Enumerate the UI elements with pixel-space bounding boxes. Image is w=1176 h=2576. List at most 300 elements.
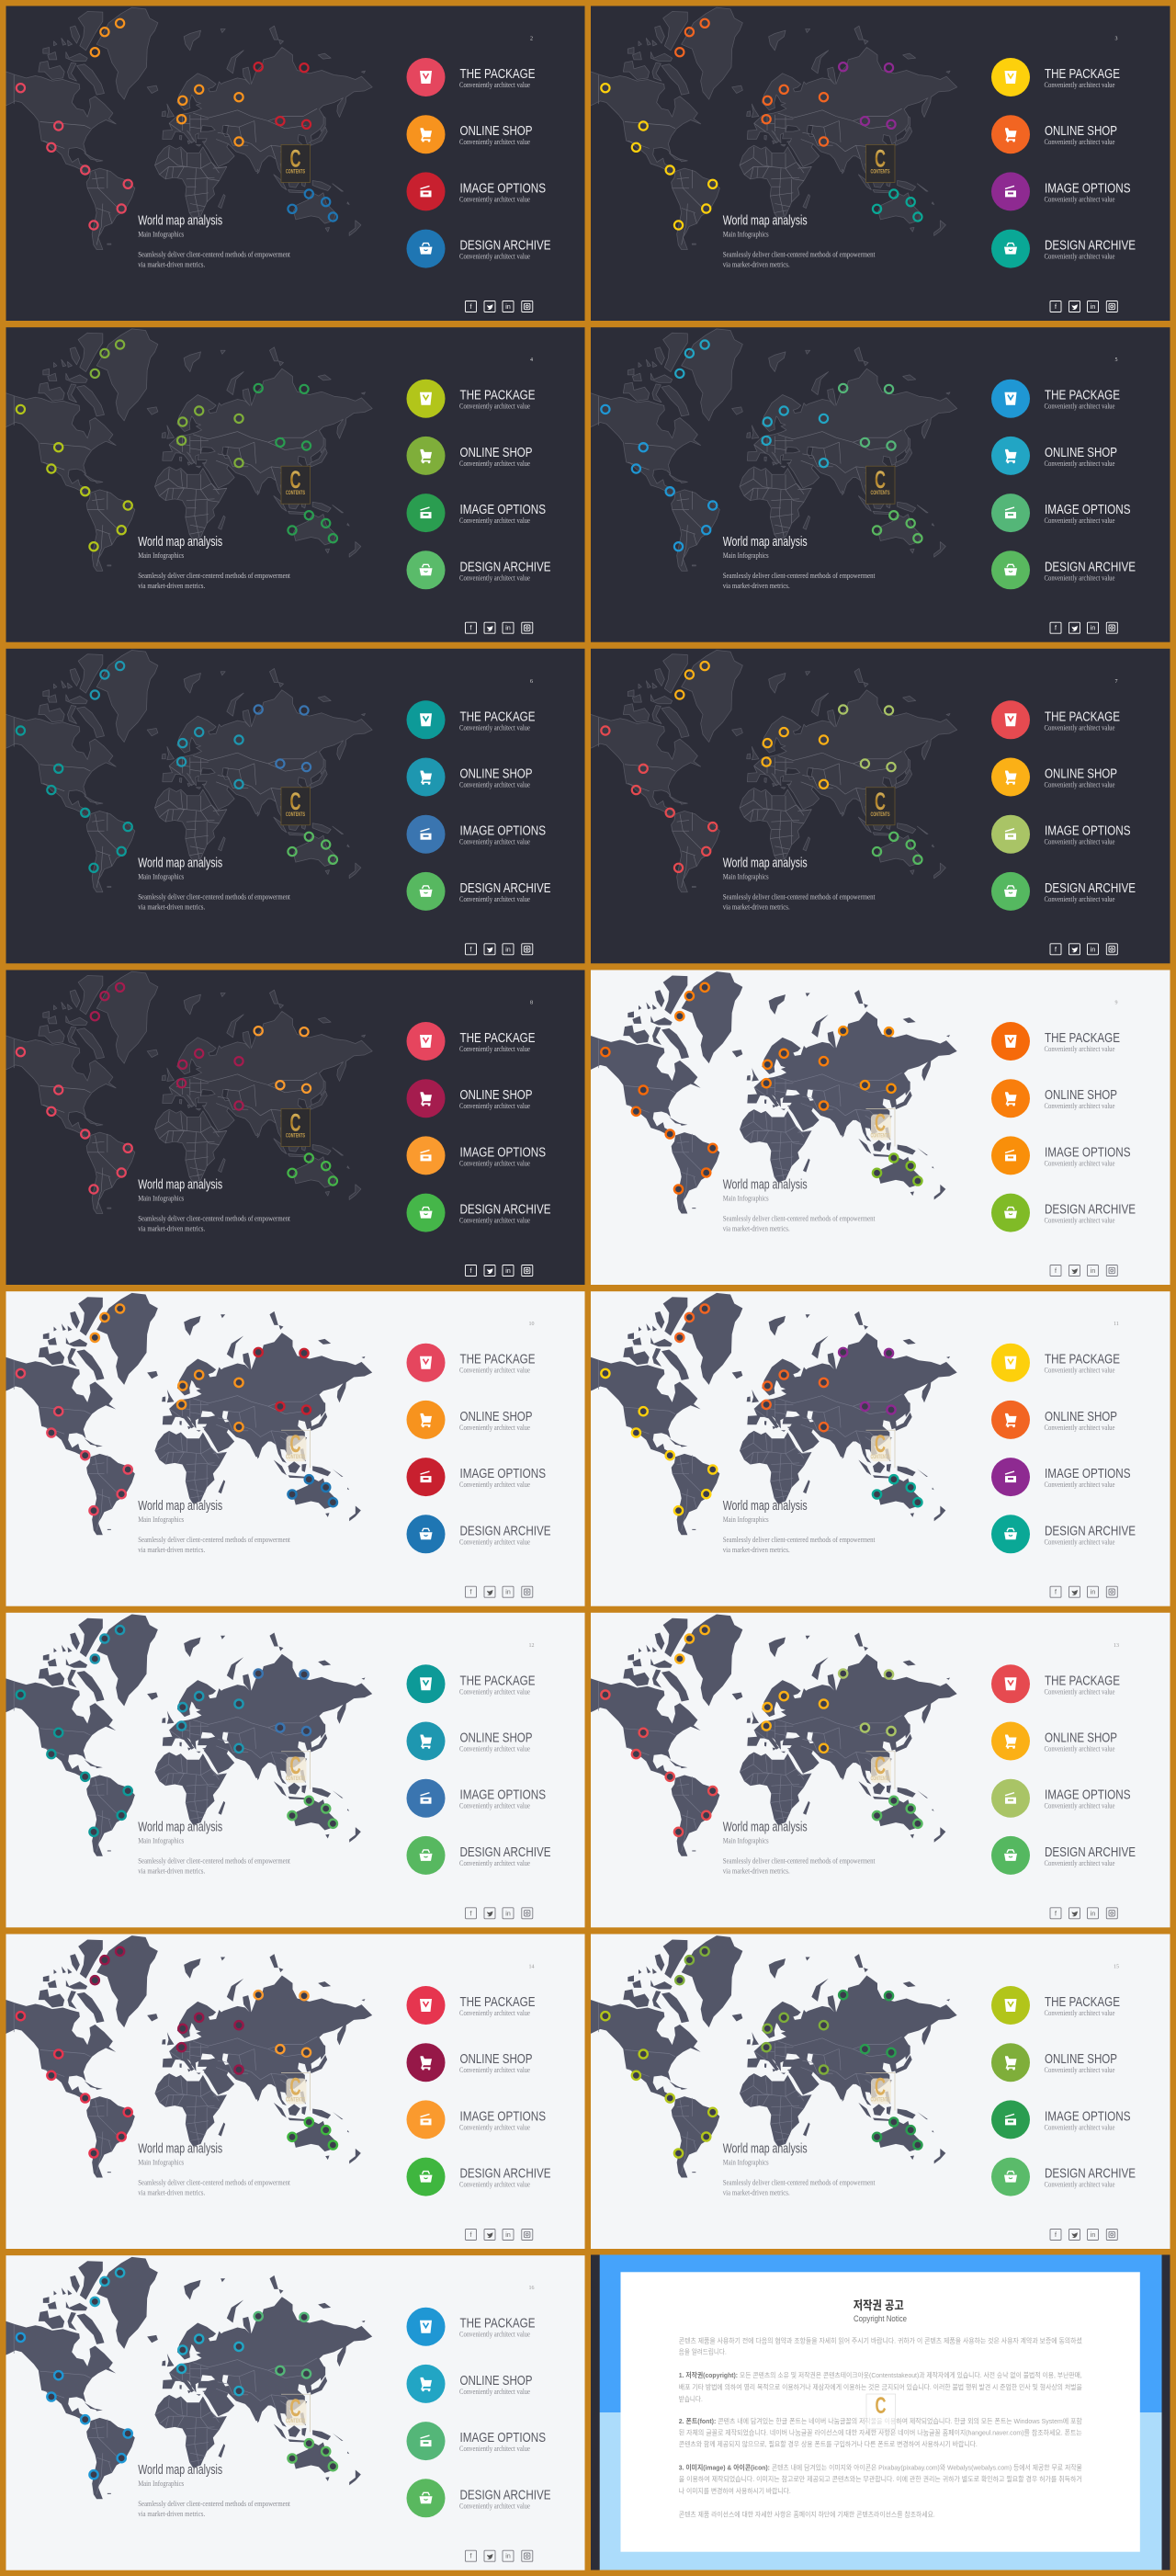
social icons: in bbox=[1091, 2232, 1095, 2239]
item: DESIGN ARCHIVE: Conveniently architect value bbox=[1044, 2181, 1115, 2189]
heading text block: Main Infographics bbox=[723, 873, 769, 881]
panel background bbox=[6, 1934, 584, 2249]
logo watermark: CONTENTS bbox=[871, 1776, 889, 1782]
social icons bbox=[1050, 622, 1117, 633]
panel 5: dark world map slide bbox=[3, 649, 585, 963]
item: ONLINE SHOP bbox=[991, 1401, 1117, 1439]
social icons: in bbox=[505, 1911, 511, 1917]
heading text block: via market-driven metrics. bbox=[723, 2188, 790, 2196]
item: DESIGN ARCHIVE bbox=[991, 1194, 1136, 1232]
heading text block: via market-driven metrics. bbox=[138, 260, 205, 268]
item: DESIGN ARCHIVE: Conveniently architect value bbox=[1044, 1538, 1115, 1546]
item: THE PACKAGE bbox=[991, 1986, 1120, 2025]
logo watermark bbox=[281, 1752, 311, 1789]
page number: 6 bbox=[530, 679, 533, 685]
social icons: in bbox=[1091, 947, 1095, 953]
item: THE PACKAGE bbox=[406, 700, 535, 739]
heading text block: Seamlessly deliver client-centered methods of empowerment bbox=[138, 2500, 291, 2508]
item: IMAGE OPTIONS bbox=[406, 815, 546, 854]
logo watermark: CONTENTS bbox=[871, 1134, 889, 1140]
map pins bbox=[17, 662, 337, 872]
item: DESIGN ARCHIVE bbox=[406, 1836, 551, 1875]
item: THE PACKAGE: Conveniently architect value bbox=[459, 723, 530, 732]
heading text block: Seamlessly deliver client-centered methods of empowerment bbox=[723, 1857, 876, 1866]
notice body text: 콘텐츠와 함께 제공되지 않으므로, 필요할 경우 상용 폰트를 구입하거나 다른 폰트로 변경하여 사용하시기 바랍니다. bbox=[679, 2440, 978, 2448]
item: IMAGE OPTIONS: Conveniently architect value bbox=[459, 1481, 530, 1489]
item: IMAGE OPTIONS: IMAGE OPTIONS bbox=[459, 180, 546, 196]
logo watermark: C bbox=[290, 466, 301, 494]
item: THE PACKAGE: THE PACKAGE bbox=[459, 66, 535, 82]
item: IMAGE OPTIONS: IMAGE OPTIONS bbox=[459, 1144, 546, 1160]
page number: 15 bbox=[1114, 1965, 1119, 1970]
social icons: in bbox=[505, 304, 511, 311]
item: ONLINE SHOP bbox=[991, 757, 1117, 796]
item: ONLINE SHOP: ONLINE SHOP bbox=[1045, 2051, 1117, 2067]
social icons: f bbox=[470, 2232, 472, 2239]
heading text block: Seamlessly deliver client-centered methods of empowerment bbox=[723, 572, 876, 580]
heading text block: Main Infographics bbox=[138, 2158, 184, 2166]
item: ONLINE SHOP bbox=[406, 115, 533, 153]
item: IMAGE OPTIONS: Conveniently architect value bbox=[459, 2123, 530, 2131]
item: THE PACKAGE: THE PACKAGE bbox=[459, 709, 535, 724]
item: ONLINE SHOP: Conveniently architect value bbox=[459, 1424, 530, 1432]
item: DESIGN ARCHIVE: DESIGN ARCHIVE bbox=[459, 238, 551, 254]
page number: 9 bbox=[1115, 1000, 1117, 1005]
heading text block: Seamlessly deliver client-centered methods of empowerment bbox=[138, 1214, 291, 1222]
item: DESIGN ARCHIVE: DESIGN ARCHIVE bbox=[459, 1202, 551, 1218]
logo watermark bbox=[865, 1108, 895, 1147]
item: THE PACKAGE: Conveniently architect value bbox=[1044, 81, 1115, 89]
item: ONLINE SHOP bbox=[991, 115, 1117, 153]
panel background bbox=[6, 6, 584, 321]
item: DESIGN ARCHIVE bbox=[406, 230, 551, 268]
social icons bbox=[1050, 1586, 1117, 1597]
heading text block: Seamlessly deliver client-centered methods of empowerment bbox=[138, 893, 291, 902]
item: ONLINE SHOP: Conveniently architect value bbox=[459, 138, 530, 146]
social icons: in bbox=[505, 626, 511, 632]
item: THE PACKAGE: Conveniently architect value bbox=[459, 1687, 530, 1696]
map pins bbox=[17, 19, 337, 230]
panel 10: light world map slide bbox=[587, 1291, 1170, 1606]
item: THE PACKAGE: THE PACKAGE bbox=[1045, 709, 1120, 724]
heading text block: via market-driven metrics. bbox=[138, 582, 205, 590]
panel 4: dark world map slide bbox=[587, 327, 1170, 642]
item: DESIGN ARCHIVE: Conveniently architect value bbox=[459, 573, 530, 582]
heading text block: Seamlessly deliver client-centered methods of empowerment bbox=[138, 1857, 291, 1866]
heading text block: via market-driven metrics. bbox=[723, 903, 790, 912]
heading text block: Main Infographics bbox=[138, 873, 184, 881]
item: DESIGN ARCHIVE: Conveniently architect value bbox=[459, 1217, 530, 1225]
heading text block: World map analysis bbox=[723, 212, 808, 228]
logo watermark: C bbox=[290, 1108, 301, 1136]
heading text block: Seamlessly deliver client-centered methods of empowerment bbox=[138, 1536, 291, 1544]
page number: 16 bbox=[529, 2286, 535, 2291]
item: DESIGN ARCHIVE: Conveniently architect value bbox=[459, 253, 530, 261]
item: ONLINE SHOP bbox=[406, 2043, 533, 2082]
logo watermark: CONTENTS bbox=[286, 812, 305, 818]
item: IMAGE OPTIONS bbox=[406, 2422, 546, 2460]
item: IMAGE OPTIONS bbox=[406, 1779, 546, 1818]
item: ONLINE SHOP: ONLINE SHOP bbox=[1045, 445, 1117, 460]
item: THE PACKAGE: THE PACKAGE bbox=[1045, 1994, 1120, 2010]
panel 15: light world map slide bbox=[3, 2255, 585, 2570]
item: THE PACKAGE bbox=[991, 58, 1120, 96]
heading text block: via market-driven metrics. bbox=[723, 1867, 790, 1876]
social icons bbox=[465, 944, 533, 955]
item: ONLINE SHOP bbox=[991, 1722, 1117, 1761]
heading text block: Main Infographics bbox=[138, 1837, 184, 1845]
notice body text: 받습니다. bbox=[679, 2395, 703, 2403]
page number: 7 bbox=[1115, 679, 1117, 685]
heading text block: World map analysis bbox=[138, 2140, 222, 2156]
notice body text: 콘텐츠 제품을 사용하기 전에 다음의 협약과 조항들을 자세히 읽어 주시기 바랍니다. 귀하가 이 콘텐츠 제품을 사용하는 것은 사용자 계약과 보증에 동의하셨 bbox=[679, 2336, 1082, 2345]
panel 13: light world map slide bbox=[3, 1934, 585, 2249]
item: IMAGE OPTIONS bbox=[991, 172, 1130, 210]
social icons: in bbox=[505, 1268, 511, 1275]
panel background bbox=[591, 970, 1170, 1285]
social icons: in bbox=[505, 1590, 511, 1596]
social icons bbox=[465, 2550, 533, 2561]
item: ONLINE SHOP bbox=[406, 2365, 533, 2403]
logo watermark bbox=[281, 466, 311, 504]
heading text block bbox=[723, 534, 876, 590]
item: IMAGE OPTIONS bbox=[991, 2100, 1130, 2139]
logo watermark: C bbox=[875, 145, 886, 173]
page number: 10 bbox=[529, 1322, 535, 1327]
heading text block: Main Infographics bbox=[138, 2480, 184, 2488]
item: IMAGE OPTIONS: Conveniently architect value bbox=[1044, 838, 1115, 846]
item: ONLINE SHOP: ONLINE SHOP bbox=[459, 1409, 533, 1424]
item: IMAGE OPTIONS: IMAGE OPTIONS bbox=[459, 1787, 546, 1803]
item: THE PACKAGE bbox=[406, 1664, 535, 1703]
logo watermark: C bbox=[290, 1752, 301, 1779]
item: DESIGN ARCHIVE: DESIGN ARCHIVE bbox=[1045, 1844, 1136, 1860]
social icons: in bbox=[1091, 1590, 1095, 1596]
social icons: in bbox=[1091, 626, 1095, 632]
social icons: f bbox=[470, 304, 472, 311]
notice body text: 3. 이미지(image) & 아이콘(icon): 콘텐츠 내에 담겨있는 이미지와 아이콘은 Pixabay(pixabay.com)와 Webalys(webalys.com) 등에서 제공한 무료 저작물 bbox=[679, 2463, 1082, 2472]
item: IMAGE OPTIONS bbox=[406, 1136, 546, 1175]
panel 2: dark world map slide bbox=[587, 6, 1170, 321]
heading text block: World map analysis bbox=[723, 1498, 808, 1514]
heading text block: via market-driven metrics. bbox=[723, 260, 790, 268]
logo watermark bbox=[866, 2393, 896, 2429]
heading text block: World map analysis bbox=[138, 1176, 222, 1192]
item: DESIGN ARCHIVE: Conveniently architect value bbox=[459, 2181, 530, 2189]
heading text block: World map analysis bbox=[138, 212, 222, 228]
heading text block: World map analysis bbox=[723, 1820, 808, 1835]
item: DESIGN ARCHIVE: DESIGN ARCHIVE bbox=[459, 1844, 551, 1860]
panel background bbox=[6, 970, 584, 1285]
page number: 8 bbox=[530, 1000, 533, 1005]
item: DESIGN ARCHIVE: Conveniently architect value bbox=[1044, 573, 1115, 582]
item: DESIGN ARCHIVE: Conveniently architect value bbox=[1044, 1859, 1115, 1867]
social icons: in bbox=[1091, 1268, 1095, 1275]
social icons: f bbox=[470, 1911, 472, 1917]
world map bbox=[587, 7, 957, 249]
panel 3: dark world map slide bbox=[3, 327, 585, 642]
item: IMAGE OPTIONS: IMAGE OPTIONS bbox=[459, 502, 546, 517]
heading text block bbox=[138, 2462, 291, 2518]
item: DESIGN ARCHIVE: DESIGN ARCHIVE bbox=[459, 1523, 551, 1538]
map pins bbox=[17, 1947, 337, 2158]
item: DESIGN ARCHIVE bbox=[991, 230, 1136, 268]
item: IMAGE OPTIONS bbox=[991, 815, 1130, 854]
social icons bbox=[465, 1586, 533, 1597]
heading text block: World map analysis bbox=[138, 856, 222, 871]
heading text block: via market-driven metrics. bbox=[723, 582, 790, 590]
logo watermark bbox=[865, 1752, 895, 1789]
heading text block: World map analysis bbox=[138, 2462, 222, 2478]
item: DESIGN ARCHIVE: DESIGN ARCHIVE bbox=[459, 2487, 551, 2502]
item: THE PACKAGE bbox=[991, 1344, 1120, 1382]
item: THE PACKAGE bbox=[406, 58, 535, 96]
item: IMAGE OPTIONS: IMAGE OPTIONS bbox=[1045, 823, 1130, 839]
map pins bbox=[17, 1304, 337, 1515]
logo watermark: C bbox=[875, 2393, 886, 2419]
map pins bbox=[601, 983, 922, 1194]
item: DESIGN ARCHIVE: Conveniently architect value bbox=[1044, 253, 1115, 261]
heading text block: World map analysis bbox=[138, 1820, 222, 1835]
heading text block: Seamlessly deliver client-centered methods of empowerment bbox=[723, 2178, 876, 2186]
item: ONLINE SHOP: Conveniently architect value bbox=[459, 2066, 530, 2074]
heading text block: via market-driven metrics. bbox=[138, 1867, 205, 1876]
item: IMAGE OPTIONS: IMAGE OPTIONS bbox=[459, 823, 546, 839]
world map bbox=[587, 329, 957, 571]
logo watermark bbox=[281, 2073, 311, 2110]
item: IMAGE OPTIONS: Conveniently architect value bbox=[459, 2445, 530, 2453]
item: THE PACKAGE: Conveniently architect value bbox=[459, 81, 530, 89]
social icons: f bbox=[1055, 1590, 1057, 1596]
heading text block: World map analysis bbox=[723, 1176, 808, 1192]
white notice card bbox=[621, 2272, 1140, 2552]
item: ONLINE SHOP bbox=[406, 757, 533, 796]
item: IMAGE OPTIONS: IMAGE OPTIONS bbox=[459, 2430, 546, 2445]
item: IMAGE OPTIONS: Conveniently architect value bbox=[459, 1159, 530, 1167]
social icons: f bbox=[470, 2554, 472, 2560]
item: THE PACKAGE bbox=[406, 1022, 535, 1061]
world map bbox=[587, 1293, 957, 1535]
logo watermark: C bbox=[875, 1752, 886, 1779]
logo watermark: CONTENTS bbox=[286, 2097, 305, 2103]
item: THE PACKAGE bbox=[991, 700, 1120, 739]
social icons bbox=[1050, 2230, 1117, 2241]
social icons: f bbox=[1055, 1268, 1057, 1275]
light blue lower background bbox=[600, 2412, 1161, 2570]
world map bbox=[3, 971, 372, 1213]
item: THE PACKAGE: Conveniently architect value bbox=[1044, 2009, 1115, 2017]
item: ONLINE SHOP: Conveniently architect value bbox=[459, 1102, 530, 1110]
item: DESIGN ARCHIVE bbox=[406, 2479, 551, 2517]
item: THE PACKAGE: THE PACKAGE bbox=[459, 2316, 535, 2332]
item: ONLINE SHOP: ONLINE SHOP bbox=[1045, 1731, 1117, 1746]
heading text block: Main Infographics bbox=[723, 1194, 769, 1202]
item: THE PACKAGE bbox=[991, 1664, 1120, 1703]
map pins bbox=[601, 1626, 922, 1836]
item: THE PACKAGE bbox=[406, 380, 535, 418]
item: IMAGE OPTIONS: Conveniently architect value bbox=[459, 195, 530, 203]
heading text block bbox=[723, 1820, 876, 1876]
social icons: f bbox=[470, 1590, 472, 1596]
world map bbox=[587, 1614, 957, 1856]
social icons bbox=[465, 1908, 533, 1919]
map pins bbox=[601, 340, 922, 550]
social icons: f bbox=[1055, 947, 1057, 953]
notice body text: 1. 저작권(copyright): 모든 콘텐츠의 소유 및 저작권은 콘텐츠테이크아웃(Contentstakeout)과 제작자에게 있습니다. 사전 승낙 없이 불법적 이용, 부난판매, bbox=[679, 2371, 1082, 2379]
item: ONLINE SHOP: ONLINE SHOP bbox=[459, 2051, 533, 2067]
item: ONLINE SHOP bbox=[991, 2043, 1117, 2082]
item: IMAGE OPTIONS: IMAGE OPTIONS bbox=[1045, 2108, 1130, 2124]
panel background bbox=[591, 1934, 1170, 2249]
heading text block: Seamlessly deliver client-centered methods of empowerment bbox=[138, 250, 291, 258]
item: DESIGN ARCHIVE bbox=[406, 1515, 551, 1553]
item: DESIGN ARCHIVE bbox=[406, 872, 551, 911]
item: IMAGE OPTIONS: IMAGE OPTIONS bbox=[1045, 180, 1130, 196]
item: IMAGE OPTIONS: IMAGE OPTIONS bbox=[1045, 1144, 1130, 1160]
item: IMAGE OPTIONS: Conveniently architect value bbox=[1044, 516, 1115, 525]
logo watermark: C bbox=[875, 1108, 886, 1136]
item: DESIGN ARCHIVE bbox=[991, 1836, 1136, 1875]
item: IMAGE OPTIONS: Conveniently architect value bbox=[1044, 195, 1115, 203]
panel background bbox=[591, 1613, 1170, 1927]
panel 8: light world map slide bbox=[587, 970, 1170, 1285]
item: THE PACKAGE: THE PACKAGE bbox=[459, 1352, 535, 1367]
notice body text: 된 자체의 글꼴로 제작되었습니다. 네이버 나눔글꼴 라이선스에 대한 자세한 사항은 네이버 나눔글꼴 홈페이지(hangeul.naver.com)를 참조하세요. 폰트는 bbox=[679, 2428, 1082, 2437]
item: DESIGN ARCHIVE bbox=[991, 2158, 1136, 2196]
item: ONLINE SHOP: ONLINE SHOP bbox=[1045, 766, 1117, 781]
item: IMAGE OPTIONS: IMAGE OPTIONS bbox=[1045, 502, 1130, 517]
item: ONLINE SHOP: Conveniently architect value bbox=[459, 1745, 530, 1753]
social icons: f bbox=[470, 626, 472, 632]
item: THE PACKAGE: THE PACKAGE bbox=[459, 1030, 535, 1046]
heading text block: via market-driven metrics. bbox=[723, 1224, 790, 1232]
item: THE PACKAGE: THE PACKAGE bbox=[1045, 1673, 1120, 1688]
panel 1: dark world map slide bbox=[3, 6, 585, 321]
item: IMAGE OPTIONS: Conveniently architect value bbox=[1044, 1481, 1115, 1489]
item: ONLINE SHOP: Conveniently architect value bbox=[1044, 1102, 1115, 1110]
heading text block: Main Infographics bbox=[723, 230, 769, 238]
item: ONLINE SHOP: ONLINE SHOP bbox=[459, 1087, 533, 1103]
item: THE PACKAGE: Conveniently architect value bbox=[459, 2331, 530, 2339]
notice body text: 콘텐츠 제품 라이선스에 대한 자세한 사항은 홈페이지 하단에 기재한 콘텐츠라이선스를 참조하세요. bbox=[679, 2511, 935, 2518]
logo watermark bbox=[865, 145, 895, 182]
logo watermark bbox=[281, 2394, 311, 2432]
item: THE PACKAGE: Conveniently architect value bbox=[459, 1045, 530, 1053]
logo watermark: C bbox=[875, 788, 886, 815]
item: ONLINE SHOP: ONLINE SHOP bbox=[1045, 1409, 1117, 1424]
heading text block: Main Infographics bbox=[138, 230, 184, 238]
panel 6: dark world map slide bbox=[587, 649, 1170, 963]
logo watermark: CONTENTS bbox=[871, 1455, 889, 1460]
social icons bbox=[1050, 1265, 1117, 1276]
heading text block bbox=[138, 1176, 291, 1232]
item: ONLINE SHOP: ONLINE SHOP bbox=[459, 766, 533, 781]
world map bbox=[3, 1935, 372, 2177]
item: THE PACKAGE: THE PACKAGE bbox=[459, 1673, 535, 1688]
item: DESIGN ARCHIVE: Conveniently architect value bbox=[459, 2502, 530, 2510]
world map bbox=[3, 7, 372, 249]
item: IMAGE OPTIONS bbox=[991, 1779, 1130, 1818]
heading text block: Seamlessly deliver client-centered methods of empowerment bbox=[138, 572, 291, 580]
logo watermark: CONTENTS bbox=[286, 1455, 305, 1460]
social icons: f bbox=[1055, 626, 1057, 632]
logo watermark: CONTENTS bbox=[286, 1134, 305, 1140]
logo watermark bbox=[865, 1430, 895, 1468]
logo watermark: CONTENTS bbox=[286, 169, 305, 175]
item: ONLINE SHOP: ONLINE SHOP bbox=[459, 445, 533, 460]
logo watermark: CONTENTS bbox=[286, 491, 305, 496]
item: IMAGE OPTIONS: Conveniently architect value bbox=[459, 838, 530, 846]
logo watermark: C bbox=[290, 145, 301, 173]
logo watermark: CONTENTS bbox=[871, 491, 889, 496]
world map bbox=[587, 650, 957, 892]
dark side strips bbox=[591, 2255, 1170, 2570]
panel background bbox=[6, 327, 584, 642]
social icons: in bbox=[505, 947, 511, 953]
item: IMAGE OPTIONS: Conveniently architect value bbox=[1044, 2123, 1115, 2131]
heading text block bbox=[138, 534, 291, 590]
page number: 12 bbox=[529, 1643, 535, 1649]
logo watermark: C bbox=[875, 1430, 886, 1458]
heading text block: World map analysis bbox=[138, 534, 222, 550]
item: THE PACKAGE: Conveniently architect value bbox=[459, 1367, 530, 1375]
heading text block: via market-driven metrics. bbox=[138, 1546, 205, 1554]
item: IMAGE OPTIONS: IMAGE OPTIONS bbox=[459, 2108, 546, 2124]
item: ONLINE SHOP: Conveniently architect value bbox=[1044, 780, 1115, 789]
page number: 2 bbox=[530, 37, 533, 42]
item: THE PACKAGE: THE PACKAGE bbox=[1045, 388, 1120, 403]
world map bbox=[587, 1935, 957, 2177]
social icons bbox=[1050, 944, 1117, 955]
item: THE PACKAGE bbox=[406, 1986, 535, 2025]
logo watermark bbox=[281, 145, 311, 182]
heading text block: via market-driven metrics. bbox=[723, 1546, 790, 1554]
item: DESIGN ARCHIVE bbox=[406, 550, 551, 589]
item: THE PACKAGE bbox=[991, 1022, 1120, 1061]
item: THE PACKAGE: Conveniently architect value bbox=[1044, 1687, 1115, 1696]
social icons bbox=[465, 622, 533, 633]
item: IMAGE OPTIONS bbox=[406, 172, 546, 210]
map pins bbox=[17, 983, 337, 1194]
heading text block bbox=[138, 212, 291, 268]
logo watermark: CONTENTS bbox=[286, 1776, 305, 1782]
logo watermark: C bbox=[290, 2073, 301, 2101]
item: THE PACKAGE: Conveniently architect value bbox=[1044, 1045, 1115, 1053]
heading text block: Seamlessly deliver client-centered methods of empowerment bbox=[723, 1536, 876, 1544]
page number: 5 bbox=[1115, 357, 1117, 363]
heading text block bbox=[723, 856, 876, 912]
heading text block: Main Infographics bbox=[723, 1837, 769, 1845]
panel background bbox=[6, 649, 584, 963]
item: IMAGE OPTIONS bbox=[991, 494, 1130, 532]
item: IMAGE OPTIONS bbox=[406, 2100, 546, 2139]
logo watermark: CONTENTS bbox=[871, 812, 889, 818]
heading text block: Seamlessly deliver client-centered methods of empowerment bbox=[723, 1214, 876, 1222]
item: DESIGN ARCHIVE: DESIGN ARCHIVE bbox=[459, 880, 551, 896]
item: ONLINE SHOP bbox=[406, 1401, 533, 1439]
item: ONLINE SHOP: Conveniently architect value bbox=[1044, 460, 1115, 468]
heading text block bbox=[138, 1820, 291, 1876]
social icons bbox=[1050, 1908, 1117, 1919]
panel 7: dark world map slide bbox=[3, 970, 585, 1285]
item: IMAGE OPTIONS: IMAGE OPTIONS bbox=[1045, 1787, 1130, 1803]
item: IMAGE OPTIONS: IMAGE OPTIONS bbox=[459, 1466, 546, 1481]
logo watermark: C bbox=[875, 2073, 886, 2101]
item: ONLINE SHOP bbox=[406, 1722, 533, 1761]
social icons: f bbox=[1055, 2232, 1057, 2239]
notice body text: 음을 알려드립니다. bbox=[679, 2347, 727, 2356]
item: IMAGE OPTIONS: IMAGE OPTIONS bbox=[1045, 1466, 1130, 1481]
